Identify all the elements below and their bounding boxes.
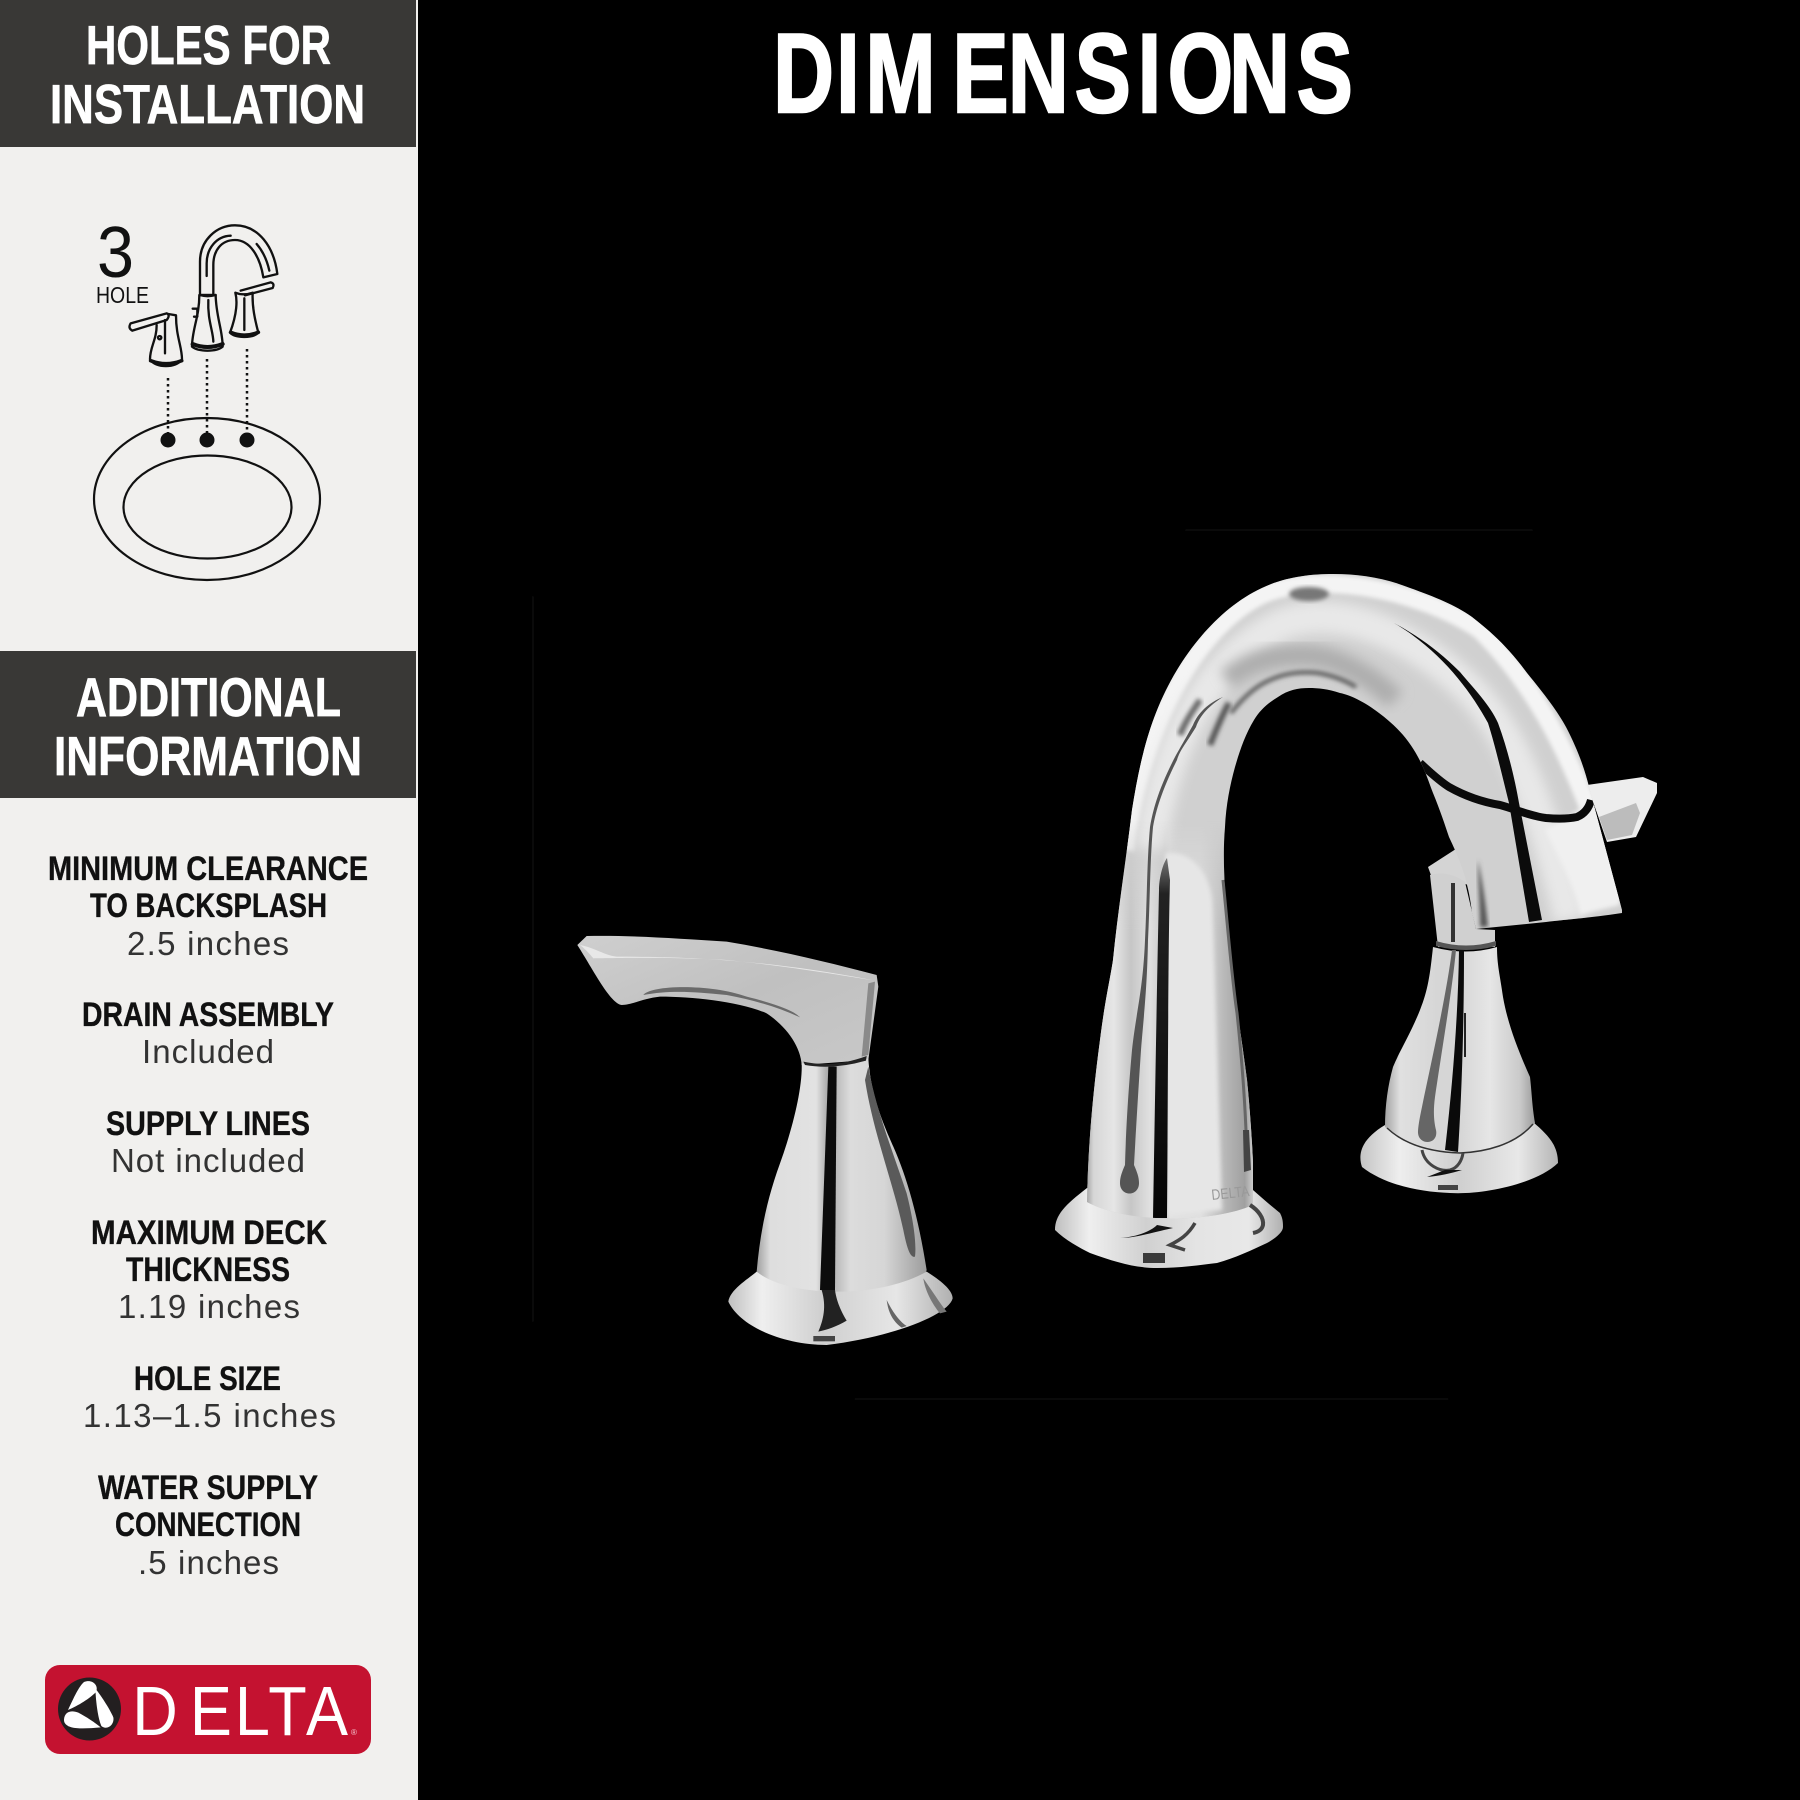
panel: holes for installation header: INSTALLATION [50,73,365,135]
height dimension: HEIGHT 7.09 inches [464,735,522,1160]
spout shading [1080,584,1620,1230]
left sidebar panel [0,0,418,1800]
spout reach dimension [1110,453,1646,536]
panel: additional information header [0,651,416,798]
base flange [1055,1188,1283,1268]
left reflection streak [1120,697,1223,1194]
width dimension: 6-16 inches [1012,1473,1282,1531]
icon: delta logo [45,1665,371,1754]
flange reflections [1120,1205,1263,1263]
text block: minimum clearance: 2.5 inches [127,925,289,962]
text block: supply lines: SUPPLY LINES [106,1105,310,1143]
text block: water supply connection: WATER SUPPLY [98,1469,318,1507]
text block: maximum deck thickness: 1.19 inches [118,1288,300,1325]
text block: minimum clearance: TO BACKSPLASH [90,887,327,925]
text block: minimum clearance: MINIMUM CLEARANCE [48,850,368,888]
panel: holes for installation header [0,0,416,147]
text block: maximum deck thickness [91,1214,327,1325]
panel: holes for installation header: HOLES FOR [86,14,331,76]
text block: hole size: HOLE SIZE [134,1360,281,1398]
icon: three-hole faucet and sink diagram [94,213,320,580]
text block: drain assembly: Included [142,1033,274,1070]
text block: water supply connection: CONNECTION [115,1506,301,1544]
text block: hole size [83,1360,336,1434]
text block: supply lines [106,1105,310,1179]
panel: additional information header: ADDITIONAL [76,666,341,728]
text block: drain assembly: DRAIN ASSEMBLY [82,996,334,1034]
icon: delta logo: DELTA [132,1673,349,1751]
text block: maximum deck thickness: THICKNESS [126,1251,290,1289]
icon: delta logo: ® [351,1728,357,1737]
chrome centre spout [1055,574,1622,1268]
text block: supply lines: Not included [111,1142,305,1179]
text block: water supply connection [98,1469,318,1581]
text block: water supply connection: .5 inches [138,1544,279,1581]
width dimension: WIDESPREAD WIDTH RANGE [857,1415,1435,1473]
text block: hole size: 1.13–1.5 inches [83,1397,336,1434]
text block: minimum clearance [48,850,368,962]
text block: maximum deck thickness: MAXIMUM DECK [91,1214,327,1252]
width dimension [831,1385,1472,1531]
icon: three-hole faucet and sink diagram: HOLE [96,282,149,308]
height dimension [464,573,549,1345]
icon: three-hole faucet and sink diagram: 3 [97,213,134,293]
title: DIMENSIONS [773,10,1353,136]
chrome left handle [577,936,953,1345]
faucet brand mark: DELTA [1211,1183,1250,1204]
spout silhouette [1087,574,1622,1218]
text block: drain assembly [82,996,334,1070]
panel: additional information header: INFORMATION [54,725,362,787]
spout reach dimension: SPOUT REACH 6.5 inches [1110,453,1646,511]
chrome right handle [1360,777,1657,1193]
